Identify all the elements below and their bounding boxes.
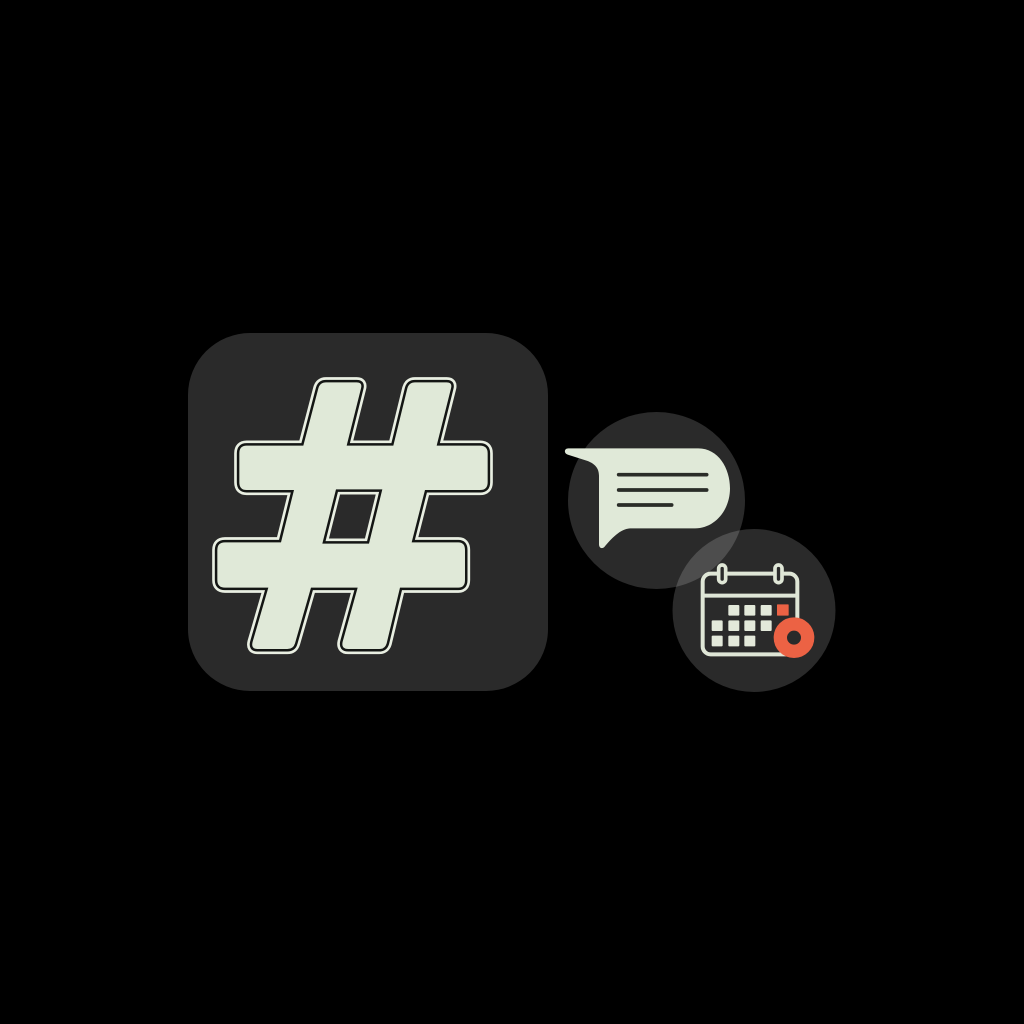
orange ring marker xyxy=(780,624,808,651)
icon: speech bubble xyxy=(565,448,730,548)
calendar day squares xyxy=(712,605,772,646)
icon: calendar xyxy=(703,565,808,654)
message text lines xyxy=(619,475,707,505)
highlighted day square xyxy=(777,604,789,616)
panel: calendar circle xyxy=(672,529,836,692)
calendar frame xyxy=(703,574,797,654)
panel: message circle xyxy=(568,412,745,589)
panel: rounded hashtag tile xyxy=(188,333,548,691)
icon: hash symbol xyxy=(217,382,488,649)
calendar binding rings xyxy=(719,565,782,583)
speech bubble body xyxy=(565,448,730,548)
